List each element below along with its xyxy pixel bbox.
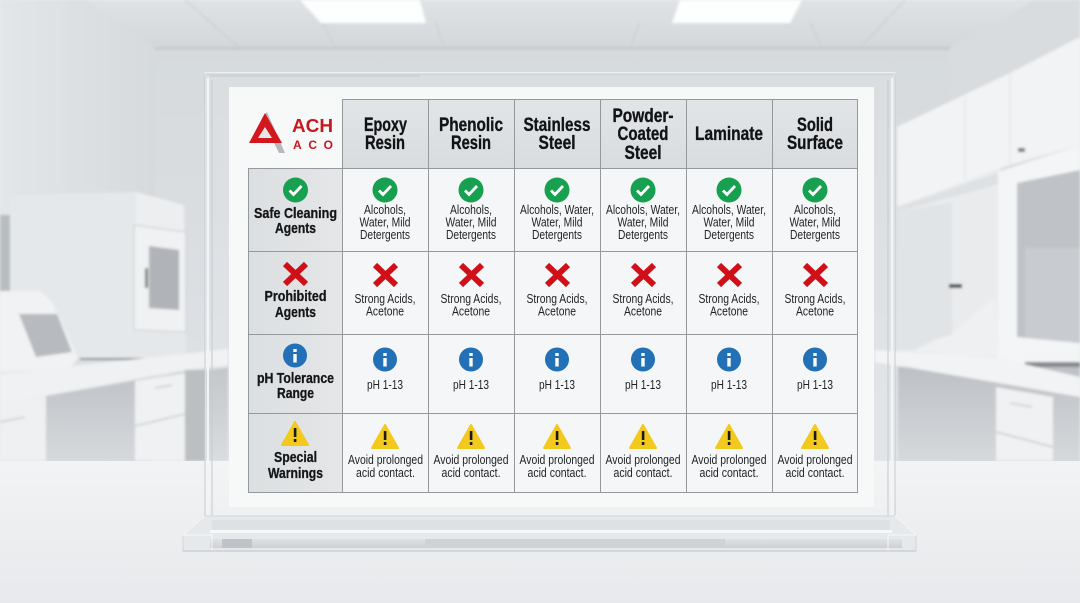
- row label: pH Tolerance Range: Range: [277, 385, 314, 402]
- cell: Laminate safe: Detergents: [704, 228, 754, 242]
- header: Stainless Steel: Stainless: [524, 114, 591, 136]
- header: Stainless Steel: [524, 114, 591, 154]
- header: Stainless Steel: Steel: [538, 132, 576, 154]
- cell: Stainless safe: Detergents: [532, 228, 582, 242]
- row label: Prohibited Agents: [264, 264, 326, 321]
- cell: Solid surface warning: acid contact.: [786, 466, 844, 480]
- cell: Epoxy safe: Water, Mild: [360, 216, 411, 230]
- white sign card: [229, 87, 874, 507]
- cell: Laminate safe: [692, 178, 766, 242]
- column headers: [364, 105, 843, 164]
- cell: Epoxy warning: acid contact.: [356, 466, 415, 480]
- cell: Solid surface safe: Water, Mild: [790, 216, 841, 230]
- row label: Prohibited Agents: Prohibited: [264, 288, 326, 305]
- right fume hood: [998, 145, 1080, 378]
- row label: pH Tolerance Range: [257, 344, 334, 402]
- cell: Powder-coated safe: Water, Mild: [618, 216, 669, 230]
- cell: Phenolic warning: [434, 425, 509, 480]
- cell: Solid surface safe: [790, 178, 841, 242]
- cell: Powder-coated safe: Alcohols, Water,: [606, 203, 680, 217]
- cell: Solid surface safe: Detergents: [790, 228, 840, 242]
- row label: Special Warnings: Special: [274, 449, 317, 466]
- row label: pH Tolerance Range: pH Tolerance: [257, 370, 334, 387]
- cell: Phenolic safe: Alcohols,: [450, 203, 492, 217]
- header: Epoxy Resin: Epoxy: [364, 114, 407, 136]
- cell: Laminate warning: Avoid prolonged: [692, 453, 767, 467]
- blurred laboratory background: [0, 0, 1080, 470]
- header: Laminate: Laminate: [695, 123, 763, 145]
- row label: Special Warnings: [268, 422, 323, 482]
- cell: Solid surface safe: Alcohols,: [794, 203, 836, 217]
- row: pH tolerance range: [257, 344, 833, 402]
- header: Powder-Coated Steel: Coated: [618, 123, 668, 145]
- cell: Phenolic safe: [446, 178, 497, 242]
- cell: Stainless warning: acid contact.: [528, 466, 586, 480]
- cell: Powder-coated warning: Avoid prolonged: [606, 453, 681, 467]
- right alcove and equipment: [897, 168, 1000, 358]
- cell: Stainless safe: Alcohols, Water,: [520, 203, 594, 217]
- left counter and cabinets: [0, 349, 228, 461]
- cell: Solid surface warning: Avoid prolonged: [778, 453, 853, 467]
- cell: Powder-coated safe: [606, 178, 680, 242]
- logo: ACH ACO: [249, 112, 333, 153]
- right upper cabinets: [897, 37, 1080, 207]
- table surface: [0, 461, 1080, 603]
- header: Phenolic Resin: [439, 114, 503, 154]
- cell: Powder-coated prohibited: Acetone: [624, 304, 662, 318]
- cell: Solid surface pH: [797, 348, 833, 392]
- cell: Laminate prohibited: Acetone: [710, 304, 748, 318]
- cell: Powder-coated safe: Detergents: [618, 228, 668, 242]
- cell: Stainless prohibited: Acetone: [538, 304, 576, 318]
- cell: Stainless warning: [520, 425, 595, 480]
- cell: Laminate safe: Water, Mild: [704, 216, 755, 230]
- left wall: [0, 0, 155, 470]
- cell: Powder-coated prohibited: [612, 265, 674, 318]
- cell: Phenolic prohibited: Acetone: [452, 304, 490, 318]
- row: safe cleaning agents: [254, 178, 841, 242]
- row: prohibited agents: [264, 264, 846, 321]
- cell: Powder-coated warning: acid contact.: [614, 466, 672, 480]
- cell: Powder-coated pH: [625, 348, 661, 392]
- grid lines: [248, 99, 858, 492]
- row label: Prohibited Agents: Agents: [275, 304, 316, 321]
- header: Phenolic Resin: Resin: [451, 132, 491, 154]
- row label: Special Warnings: Warnings: [268, 465, 323, 482]
- cell: Solid surface prohibited: Strong Acids,: [784, 292, 846, 306]
- left lab equipment: [0, 192, 186, 372]
- cell: Powder-coated warning: [606, 425, 681, 480]
- header: Solid Surface: Solid: [797, 114, 833, 136]
- cell: Stainless prohibited: Strong Acids,: [526, 292, 588, 306]
- ceiling: [85, 0, 1035, 50]
- header: Epoxy Resin: Resin: [365, 132, 405, 154]
- header: Phenolic Resin: Phenolic: [439, 114, 503, 136]
- logo: ACH ACO: ACO: [293, 138, 333, 152]
- row: special warnings: [268, 422, 853, 482]
- data cell background: [342, 168, 858, 492]
- cell: Phenolic warning: Avoid prolonged: [434, 453, 509, 467]
- cell: Powder-coated prohibited: Strong Acids,: [612, 292, 674, 306]
- cell: Stainless safe: [520, 178, 594, 242]
- cell: Laminate pH: [711, 348, 747, 392]
- header: Solid Surface: Surface: [787, 132, 843, 154]
- cell: Laminate warning: [692, 425, 767, 480]
- row label: Safe Cleaning Agents: Safe Cleaning: [254, 205, 337, 222]
- logo: ACH ACO: ACH: [292, 116, 333, 136]
- cell: Epoxy prohibited: Acetone: [366, 304, 404, 318]
- cell: Laminate warning: acid contact.: [700, 466, 758, 480]
- row label column background: [248, 168, 342, 492]
- cell: Powder-coated pH: pH 1-13: [625, 378, 661, 392]
- header: Powder-Coated Steel: Powder-: [612, 105, 674, 127]
- header: Powder-Coated Steel: Steel: [624, 142, 662, 164]
- row label: Safe Cleaning Agents: [254, 178, 337, 237]
- cell: Epoxy pH: pH 1-13: [367, 378, 403, 392]
- cell: Laminate safe: Alcohols, Water,: [692, 203, 766, 217]
- header: Powder-Coated Steel: [612, 105, 674, 164]
- cell: Epoxy pH: [367, 348, 403, 392]
- cell: Epoxy warning: Avoid prolonged: [348, 453, 423, 467]
- cell: Phenolic prohibited: Strong Acids,: [440, 292, 502, 306]
- cell: Phenolic safe: Water, Mild: [446, 216, 497, 230]
- cell: Laminate prohibited: [698, 265, 760, 318]
- cell: Solid surface pH: pH 1-13: [797, 378, 833, 392]
- acrylic display stand: [183, 73, 916, 551]
- row label: Safe Cleaning Agents: Agents: [275, 220, 316, 237]
- header: Epoxy Resin: [364, 114, 407, 154]
- comparison table: [248, 99, 858, 492]
- cell: Phenolic pH: pH 1-13: [453, 378, 489, 392]
- cell: Solid surface prohibited: [784, 265, 846, 318]
- right wall: [950, 0, 1080, 470]
- cell: Stainless warning: Avoid prolonged: [520, 453, 595, 467]
- cell: Epoxy prohibited: [354, 265, 416, 318]
- cell: Epoxy prohibited: Strong Acids,: [354, 292, 416, 306]
- header: Solid Surface: [787, 114, 843, 154]
- cell: Stainless pH: pH 1-13: [539, 378, 575, 392]
- cell: Laminate prohibited: Strong Acids,: [698, 292, 760, 306]
- acrylic base: [183, 516, 916, 551]
- ceiling lights: [300, 0, 802, 23]
- cell: Phenolic warning: acid contact.: [442, 466, 500, 480]
- cell: Phenolic prohibited: [440, 265, 502, 318]
- cell: Epoxy warning: [348, 425, 423, 480]
- cell: Stainless prohibited: [526, 265, 588, 318]
- right counter and cabinets: [875, 350, 1080, 462]
- cell: Phenolic pH: [453, 348, 489, 392]
- cell: Epoxy safe: [360, 178, 411, 242]
- cell: Solid surface prohibited: Acetone: [796, 304, 834, 318]
- cell: Solid surface warning: [778, 425, 853, 480]
- cell: Stainless safe: Water, Mild: [532, 216, 583, 230]
- cell: Phenolic safe: Detergents: [446, 228, 496, 242]
- cell: Epoxy safe: Alcohols,: [364, 203, 406, 217]
- cell: Stainless pH: [539, 348, 575, 392]
- cell: Laminate pH: pH 1-13: [711, 378, 747, 392]
- header row backgrounds: [342, 99, 858, 168]
- cell: Epoxy safe: Detergents: [360, 228, 410, 242]
